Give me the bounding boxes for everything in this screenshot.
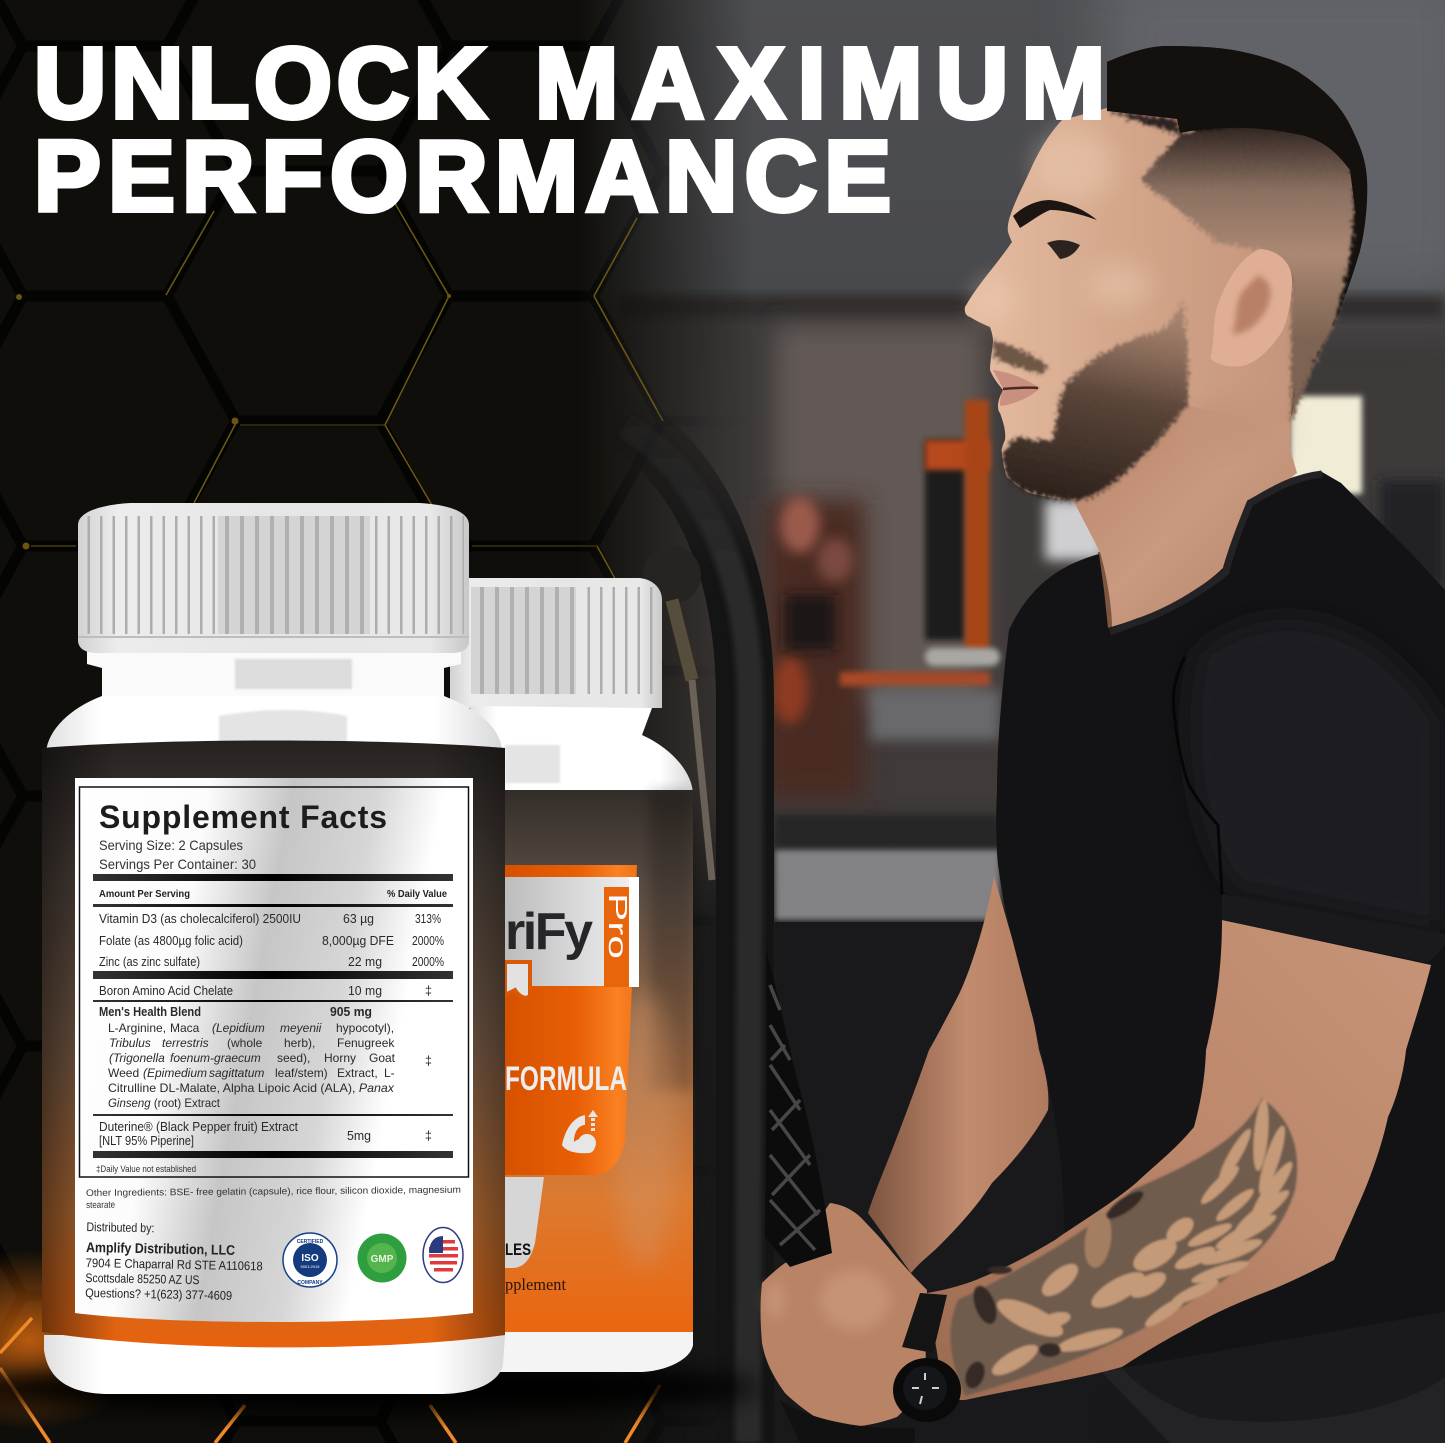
back bottle [450,578,693,1372]
icon: USA flag badge [423,1228,463,1282]
table rules [93,874,453,1158]
tattoo [951,1098,1297,1396]
gym equipment: cable and carabiner [610,415,750,1443]
men's health blend: 905 mg [330,1005,372,1019]
face [965,108,1300,500]
nutrient rows: 2000% [412,934,444,948]
nutrient rows: Boron Amino Acid Chelate [99,984,233,998]
men's health blend: Horny [324,1051,356,1065]
heading: supplement facts: Supplement Facts [99,799,387,835]
title: MAXIMUM [535,28,1105,140]
icon: GMP badge: GMP [371,1254,394,1265]
mouth line [1003,388,1038,389]
shirt collar band [1110,474,1322,632]
icon: ISO badge: COMPANY [297,1280,323,1286]
small silver panel [505,1177,544,1268]
title: UNLOCK [34,28,486,140]
serving info: Serving Size: 2 Capsules [99,837,243,853]
white strip and orange pro tag [603,877,639,987]
men's health blend: (whole [227,1036,263,1050]
ear inner [1232,275,1270,334]
men's health blend: meyenii [280,1021,322,1035]
men's health blend: Fenugreek [337,1036,395,1050]
back bottle shoulder shadow [505,745,560,783]
faded hair [1107,111,1354,425]
title [34,28,1105,232]
nutrient rows: 63 µg [343,912,374,926]
icon: ISO badge: CERTIFIED [297,1239,324,1245]
wrap label [42,740,505,1347]
distributor address: Scottsdale 85250 AZ US [85,1271,200,1287]
men's health blend: herb), [284,1036,315,1050]
serving info: Servings Per Container: 30 [99,856,256,872]
footnote: ‡Daily Value not established [96,1164,196,1174]
formula text: FORMULA [505,1060,627,1098]
logo arrow fragment [505,962,530,998]
person [760,46,1445,1443]
men's health blend: Goat [369,1051,396,1065]
watch [893,1293,961,1422]
other ingredients: Other Ingredients: BSE- free gelatin (capsule), rice flour, silicon dioxide, magnesium [86,1185,461,1199]
white facts panel [75,778,473,1322]
supplement text fragment: pplement [505,1275,566,1294]
back bottle neck and shoulder [470,706,693,795]
background: hexagon pattern [0,0,734,1443]
distributor address [85,1220,264,1303]
wing feathers [988,1099,1297,1381]
table header: % Daily Value [387,888,447,900]
title: PERFORMANCE [34,120,891,232]
icon: ISO badge: ISO [301,1253,319,1264]
men's health blend: (Epimedium [143,1066,207,1080]
tattoo dark accents [962,1187,1147,1391]
neck [87,650,461,700]
men's health blend: leaf/stem) [275,1066,328,1080]
near arm [927,920,1431,1400]
men's health blend: (Lepidium [212,1021,265,1035]
men's health blend: foenum-graecum [170,1051,261,1065]
jaw to neck blend [1187,397,1283,453]
knuckle shading [765,1270,890,1330]
duterine row: Duterine® (Black Pepper fruit) Extract [99,1120,298,1134]
men's health blend: hypocotyl), [336,1021,394,1035]
duterine row: [NLT 95% Piperine] [99,1134,194,1148]
men's health blend [99,1005,432,1110]
eyebrow [1013,200,1097,228]
back bottle label [500,790,693,1332]
men's health blend: terrestris [162,1036,209,1050]
bottle cap [78,503,469,653]
other ingredients [86,1185,461,1211]
pro text: Pro [603,893,633,959]
nutrient rows: Zinc (as zinc sulfate) [99,955,200,969]
nutrient rows: ‡ [425,984,432,998]
orange floor glow lines [0,1250,660,1443]
men's health blend: ‡ [425,1054,432,1068]
tattoo shading [951,1098,1297,1396]
orange panel [505,865,637,1175]
beard [1002,299,1188,500]
sleeve seam [1173,657,1222,895]
duterine row: 5mg [347,1129,371,1143]
icon: GMP badge [358,1234,406,1282]
pants [1090,1290,1445,1443]
neck shadow [1098,552,1112,630]
nutrient rows: 10 mg [348,984,382,998]
nutrient rows: 313% [415,912,441,926]
ear [1210,249,1292,367]
men's health blend: Citrulline DL-Malate, Alpha Lipoic Acid (ALA), Panax [108,1081,395,1095]
shirt [996,472,1445,1372]
table header: Amount Per Serving [99,888,190,900]
supplement facts box [80,787,468,1177]
nutrient rows: 2000% [412,955,444,969]
nutrient rows: 22 mg [348,955,382,969]
men's health blend: seed), [277,1051,310,1065]
men's health blend: Ginseng (root) Extract [108,1096,221,1110]
men's health blend: L-Arginine, [108,1021,166,1035]
icon: ISO badge [283,1233,337,1287]
hair top [1107,46,1367,245]
hair back layer [1107,46,1367,425]
distributor address: Amplify Distribution, LLC [86,1239,235,1258]
eye [1047,240,1080,259]
silver logo panel [505,877,639,986]
far arm [868,876,1048,1273]
distributor address: 7904 E Chaparral Rd STE A110618 [86,1256,263,1273]
brand name fragment: riFy [505,903,593,961]
sleeve shading [1190,619,1440,930]
lips [993,370,1040,406]
men's health blend: Men's Health Blend [99,1005,201,1019]
capsule count fragment: LES [505,1240,531,1259]
nutrient rows [99,912,444,998]
hexagon gold edge highlights [31,200,663,582]
table header [99,888,447,900]
men's health blend: Tribulus [109,1036,151,1050]
men's health blend: Weed [108,1066,139,1080]
forehead and cheek highlights [975,130,1152,322]
neck [1072,400,1297,632]
floor shadow beneath bottles [0,1364,760,1412]
nutrient rows: Folate (as 4800µg folic acid) [99,934,243,948]
shoulder [46,696,502,752]
mustache [993,340,1048,374]
men's health blend: sagittatum [209,1066,264,1080]
men's health blend: (Trigonella [109,1051,165,1065]
duterine row [99,1120,432,1148]
men's health blend: Maca [170,1021,200,1035]
battle rope [765,950,915,1443]
nutrient rows: 8,000µg DFE [322,934,394,948]
duterine row: ‡ [425,1129,432,1143]
icon: flexed arm [562,1110,598,1153]
distributor address: Questions? +1(623) 377-4609 [85,1286,232,1303]
front bottle [42,503,505,1394]
back bottle cap [450,578,662,708]
other ingredients: stearate [86,1200,115,1211]
men's health blend: L- [384,1066,395,1080]
sleeve cuff [1222,894,1445,963]
hexagon corner glints [16,294,451,550]
distributor address: Distributed by: [86,1220,155,1235]
hand [760,1203,927,1428]
back bottle base [490,1325,693,1372]
icon: ISO badge: 9001:2015 [301,1264,320,1269]
serving info [99,837,256,872]
men's health blend: Extract, [337,1066,378,1080]
shoulder centre shading [219,710,347,745]
bottle base [44,1335,505,1394]
nutrient rows: Vitamin D3 (as cholecalciferol) 2500IU [99,912,301,926]
